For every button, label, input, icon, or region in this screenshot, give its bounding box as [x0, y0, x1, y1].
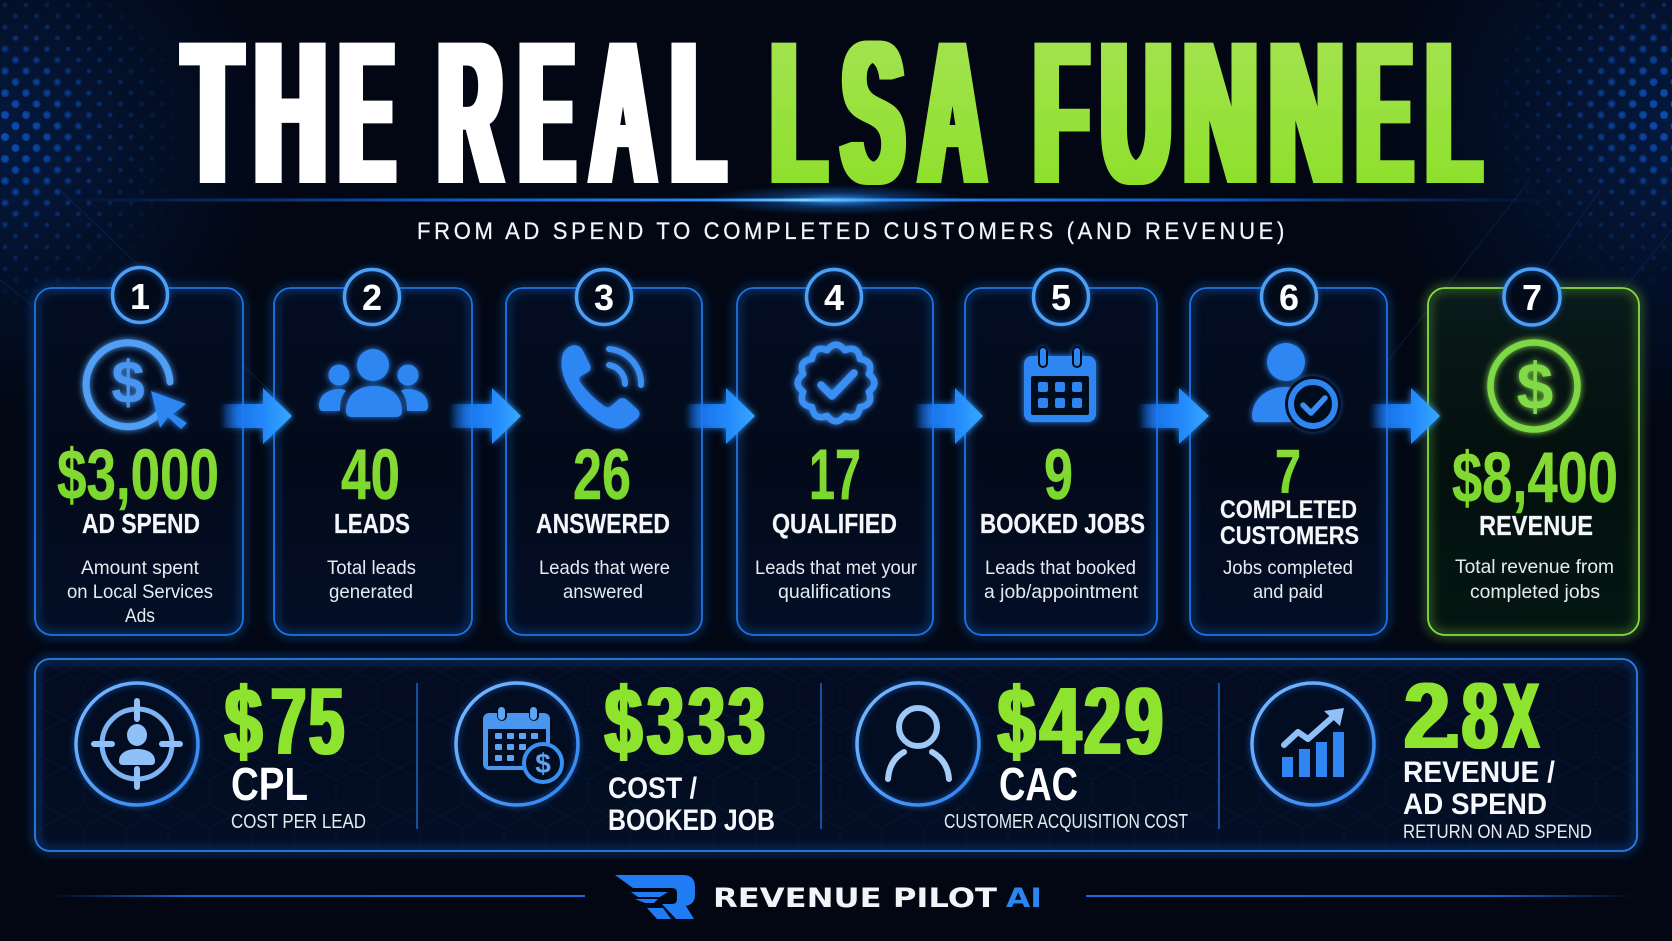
value: 9 — [1125, 668, 1163, 775]
value: 9 — [1044, 436, 1073, 515]
metric: CPL — [76, 668, 366, 833]
description: and paid — [1253, 581, 1323, 603]
step number 1: 1 — [130, 276, 150, 317]
description: a job/appointment — [984, 581, 1139, 603]
title: THE REAL: E — [520, 0, 574, 227]
panel: metrics bar — [35, 659, 1637, 851]
label: QUALIFIED — [772, 508, 897, 539]
value: 2 — [1404, 663, 1450, 768]
icon: customer outline — [857, 683, 979, 805]
background — [0, 0, 1672, 394]
step number 2 — [344, 270, 400, 324]
footer rule right — [1086, 895, 1636, 897]
title: THE REAL: R — [439, 0, 502, 227]
label: LEADS — [334, 508, 410, 539]
description: Amount spent — [81, 557, 200, 579]
panel: step 1 ad spend — [35, 268, 243, 635]
label: CPL — [231, 758, 308, 810]
icon: calendar dollar: $ — [535, 748, 551, 779]
title: LSA FUNNEL — [772, 0, 1481, 227]
label: CAC — [999, 758, 1078, 810]
step number 1 — [112, 268, 168, 322]
icon: dollar coin — [1490, 342, 1578, 430]
label: COMPLETED — [1220, 496, 1357, 524]
label: BOOKED JOB — [608, 804, 775, 837]
icon: calendar dollar — [456, 683, 578, 805]
label: ANSWERED — [536, 508, 670, 539]
step number 4 — [806, 270, 862, 324]
title: LSA FUNNEL: N — [1184, 0, 1258, 227]
step number 6 — [1262, 270, 1316, 324]
arrow: step 6 to 7 — [1370, 388, 1440, 444]
brand AI: AI — [1006, 883, 1042, 914]
value: $3,000 — [57, 436, 219, 515]
panel: step 6 completed customers — [1190, 270, 1387, 635]
description: Total leads — [327, 557, 416, 579]
value: 7 — [1275, 438, 1301, 507]
description: Jobs completed — [1223, 557, 1353, 579]
panel: step 5 booked jobs — [965, 270, 1157, 635]
description: qualifications — [778, 581, 891, 603]
icon: people — [319, 349, 428, 417]
label: REVENUE — [1479, 510, 1593, 541]
description: Ads — [125, 605, 155, 627]
arrow: step 2 to 3 — [449, 388, 521, 444]
description: Leads that were — [539, 557, 670, 579]
value: 7 — [271, 668, 306, 775]
step number 5: 5 — [1051, 277, 1071, 318]
description: Leads that met your — [755, 557, 917, 579]
value: 4 — [1040, 668, 1081, 775]
label: COST / — [608, 772, 698, 805]
icon: dollar coin: $ — [1517, 349, 1553, 423]
value: $ — [998, 668, 1035, 775]
panel: step 4 qualified — [737, 270, 933, 635]
description: Leads that booked — [985, 557, 1136, 579]
panel: step 7 revenue — [1428, 269, 1639, 635]
icon: R mark — [615, 875, 695, 919]
step number 5 — [1034, 270, 1088, 324]
value: 5 — [309, 668, 344, 775]
title — [184, 0, 1481, 227]
arrow: step 4 to 5 — [914, 388, 983, 444]
description: Total revenue from — [1455, 556, 1614, 578]
icon: calendar — [1024, 346, 1096, 422]
value: 3 — [688, 668, 725, 775]
step number 7 — [1504, 269, 1560, 325]
description: completed jobs — [1470, 581, 1600, 603]
text: L — [1427, 0, 1481, 227]
sublabel: COST PER LEAD — [231, 811, 366, 833]
arrow: step 1 to 2 — [220, 388, 292, 444]
title: THE REAL: T — [184, 0, 241, 227]
footer rule left — [49, 895, 585, 897]
value: 8 — [1462, 663, 1498, 768]
step number 3: 3 — [594, 277, 614, 318]
title: LSA FUNNEL: U — [1101, 0, 1171, 227]
title: THE REAL: E — [340, 0, 394, 227]
title: LSA FUNNEL: F — [1035, 0, 1088, 227]
arrow: step 5 to 6 — [1138, 388, 1209, 444]
value: $ — [225, 668, 262, 775]
description: answered — [563, 581, 643, 603]
value: 3 — [728, 668, 765, 775]
value: 3 — [647, 668, 684, 775]
label: BOOKED JOBS — [980, 508, 1145, 539]
metric: CAC — [857, 668, 1188, 833]
step number 4: 4 — [824, 277, 844, 318]
arrow: step 3 to 4 — [685, 388, 755, 444]
label: CUSTOMERS — [1220, 522, 1359, 550]
icon: growth chart — [1252, 683, 1374, 805]
value: 2 — [1084, 668, 1121, 775]
value: 17 — [809, 436, 861, 515]
title underline glow — [60, 185, 1550, 215]
step number 6: 6 — [1279, 277, 1299, 318]
title: LSA FUNNEL: N — [1270, 0, 1344, 227]
description: on Local Services — [67, 581, 213, 603]
icon: customer check — [1252, 343, 1341, 432]
panel: step 2 leads — [274, 270, 472, 635]
title: THE REAL: A — [591, 0, 655, 227]
icon: dollar with cursor: $ — [111, 349, 145, 416]
brand name: REVENUE PILOT — [713, 883, 998, 914]
metric: return on ad spend — [1252, 663, 1592, 843]
step number 2: 2 — [362, 277, 382, 318]
value: . — [1446, 663, 1459, 768]
title: LSA FUNNEL: A — [920, 0, 985, 227]
label: REVENUE / — [1403, 756, 1556, 789]
step number 3 — [576, 270, 632, 324]
step number 7: 7 — [1522, 277, 1542, 318]
value: 40 — [341, 436, 400, 515]
value: X — [1503, 663, 1539, 768]
sublabel: RETURN ON AD SPEND — [1403, 822, 1592, 843]
title: LSA FUNNEL: E — [1357, 0, 1412, 227]
icon: verified badge — [798, 345, 874, 421]
title: LSA FUNNEL: L — [772, 0, 826, 227]
panel: step 3 answered — [506, 270, 702, 635]
description: generated — [329, 581, 413, 603]
icon: target person — [76, 683, 198, 805]
metric: cost per booked job — [456, 668, 775, 837]
label: AD SPEND — [1403, 788, 1547, 821]
title: THE REAL — [184, 0, 724, 227]
value: $8,400 — [1452, 439, 1618, 518]
title: LSA FUNNEL: S — [842, 0, 904, 227]
icon: phone — [562, 345, 641, 429]
label: AD SPEND — [82, 508, 200, 539]
subtitle: FROM AD SPEND TO COMPLETED CUSTOMERS (AND REVENUE) — [417, 218, 1288, 245]
title: L — [672, 0, 724, 227]
logo — [615, 875, 1042, 919]
title: THE REAL: H — [255, 0, 326, 227]
value: $ — [605, 668, 642, 775]
icon: dollar with cursor — [86, 343, 187, 429]
value: 26 — [573, 436, 631, 515]
sublabel: CUSTOMER ACQUISITION COST — [944, 811, 1188, 833]
